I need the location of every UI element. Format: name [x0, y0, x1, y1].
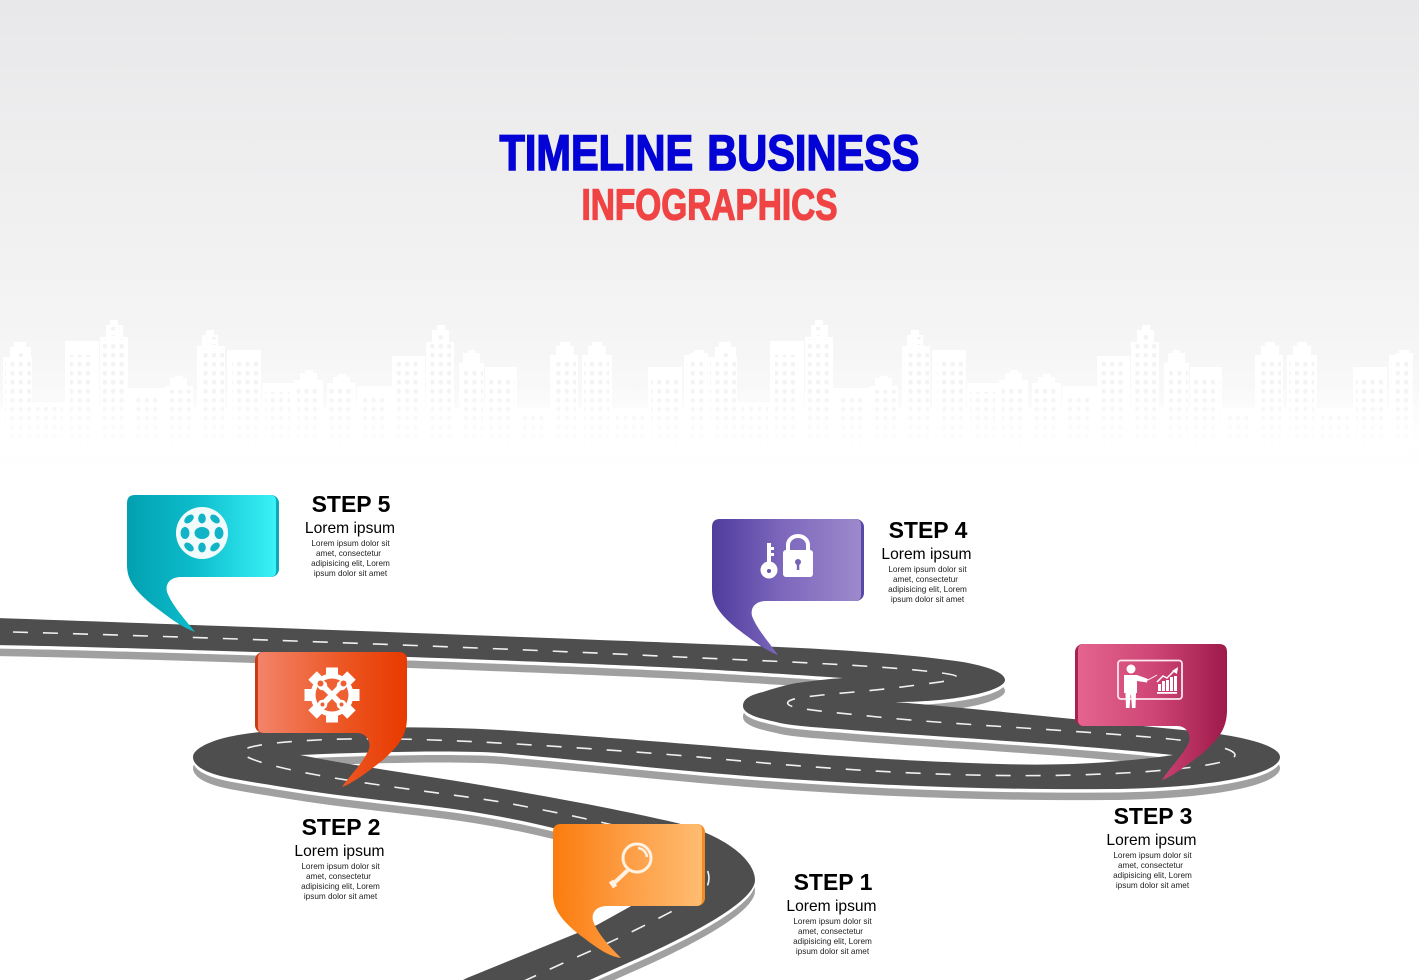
text block: step 2: adipisicing elit, Lorem — [301, 882, 380, 891]
icon: presenter with chart — [1118, 660, 1182, 708]
text block: step 5: ipsum dolor sit amet — [314, 569, 388, 578]
text block: step 5 — [305, 491, 395, 578]
icon: key and padlock — [760, 536, 813, 578]
text block: step 4: Lorem ipsum — [881, 546, 972, 563]
title line: timeline business: TIMELINE BUSINESS — [500, 125, 920, 181]
text block: step 4: Lorem ipsum dolor sit — [888, 565, 967, 574]
text block: step 1: amet, consectetur — [798, 927, 863, 936]
text block: step 2: Lorem ipsum — [294, 843, 385, 860]
icon: globe — [176, 507, 228, 559]
background gradient — [0, 0, 1419, 470]
text block: step 3: Lorem ipsum dolor sit — [1113, 851, 1192, 860]
panel: step 3 bubble — [1075, 644, 1227, 780]
panel: step 4 bubble — [712, 519, 864, 655]
icon: gear and wrenches — [304, 668, 360, 722]
panel: step 1 bubble — [553, 824, 705, 958]
text block: step 1: Lorem ipsum — [786, 898, 877, 915]
text block: step 2: ipsum dolor sit amet — [304, 892, 378, 901]
text block: step 2: amet, consectetur — [306, 872, 371, 881]
text block: step 2: STEP 2 — [302, 814, 380, 840]
panel: step 5 bubble — [127, 495, 279, 632]
panel: step 2 bubble — [255, 652, 407, 787]
text block: step 3: Lorem ipsum — [1106, 832, 1197, 849]
text block: step 3: adipisicing elit, Lorem — [1113, 871, 1192, 880]
text block: step 3: STEP 3 — [1114, 803, 1192, 829]
text block: step 3 — [1106, 803, 1197, 890]
text block: step 1: ipsum dolor sit amet — [796, 947, 870, 956]
text block: step 5: adipisicing elit, Lorem — [311, 559, 390, 568]
city skyline — [0, 320, 1419, 455]
title — [500, 125, 920, 230]
winding road — [0, 618, 1280, 980]
text block: step 3: amet, consectetur — [1118, 861, 1183, 870]
text block: step 5: Lorem ipsum dolor sit — [311, 539, 390, 548]
title line: infographics: INFOGRAPHICS — [582, 182, 838, 230]
text block: step 4: ipsum dolor sit amet — [891, 595, 965, 604]
text block: step 4: STEP 4 — [889, 517, 968, 543]
text block: step 2 — [294, 814, 385, 901]
text block: step 5: amet, consectetur — [316, 549, 381, 558]
text block: step 2: Lorem ipsum dolor sit — [301, 862, 380, 871]
text block: step 5: STEP 5 — [312, 491, 391, 517]
text block: step 4 — [881, 517, 972, 604]
text block: step 3: ipsum dolor sit amet — [1116, 881, 1190, 890]
text block: step 1 — [786, 869, 877, 956]
text block: step 4: adipisicing elit, Lorem — [888, 585, 967, 594]
text block: step 1: Lorem ipsum dolor sit — [793, 917, 872, 926]
text block: step 1: STEP 1 — [794, 869, 873, 895]
road centre dashes — [13, 632, 1235, 980]
text block: step 5: Lorem ipsum — [305, 520, 395, 537]
text block: step 1: adipisicing elit, Lorem — [793, 937, 872, 946]
text block: step 4: amet, consectetur — [893, 575, 958, 584]
icon: magnifying glass — [611, 844, 651, 887]
